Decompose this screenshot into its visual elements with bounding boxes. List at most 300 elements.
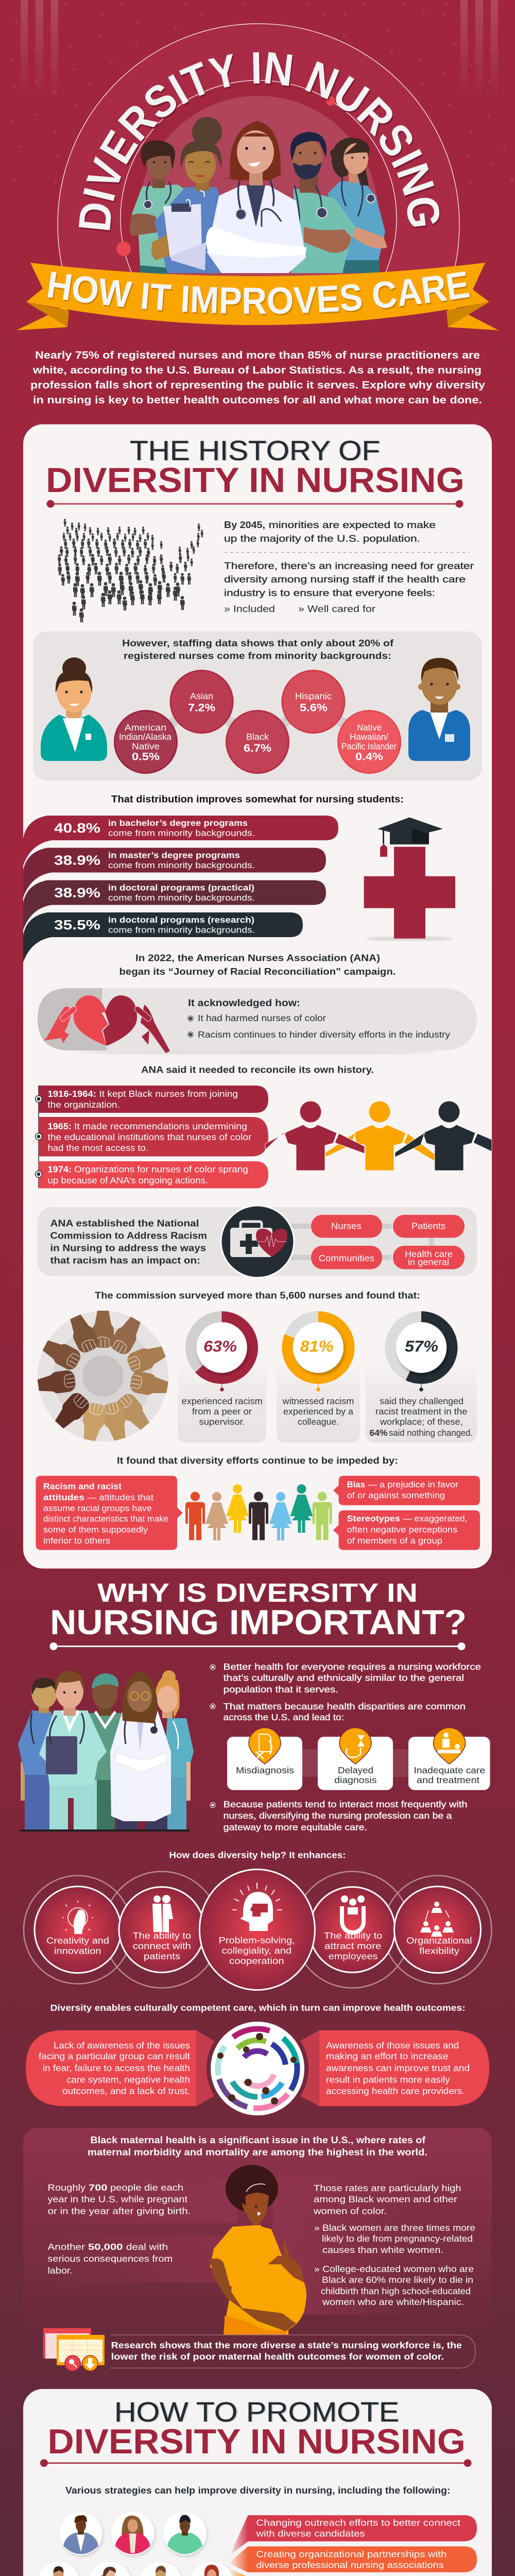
bar: masters [23,848,326,897]
bullet: disparities: That matters because health disparities are common [224,1701,466,1711]
callout: stereotypes: — exaggerated, [403,1514,468,1523]
nurse a [18,1677,57,1829]
bullet: better health: population that it serves. [224,1684,338,1694]
nurse 2 with clipboard [151,117,224,273]
stat card: 63%: experienced racism [182,1396,263,1406]
bubble: Asian [170,671,233,733]
header decoration: sparkles and light stripes [11,0,513,183]
bubble: American Indian/Alaska Native [114,711,177,773]
callout: stereotypes: often negative perceptions [347,1525,457,1535]
main title: DIVERSITY IN NURSING [78,52,440,232]
bar: doctoral research: 35.5% [54,917,100,933]
card: misdiagnosis: Misdiagnosis [236,1765,294,1775]
text: 700 people: Roughly [47,2182,85,2193]
bubble: Hispanic: 5.6% [300,702,328,714]
pill: Communities: Communities [319,1253,374,1263]
subheading: impeded by: It found that diversity efforts continue to be impeded by: [117,1455,398,1466]
icon: medical bag with heart [221,1206,294,1278]
timeline item: 1965: had the most access to. [47,1143,148,1153]
text: national commission: in Nursing to address the ways [50,1243,206,1253]
text: it acknowledged how [188,998,450,1040]
strategy tails [229,2515,248,2576]
stat card: 63%: from a peer or [192,1406,252,1417]
bar: bachelors: come from minority backgrounds. [108,828,255,838]
donut chart: 57%: 57% [405,1337,438,1355]
bubble: Native Hawaiian/Pacific Islander: 0.4% [355,751,383,763]
bar: masters: in master’s degree programs [108,850,240,860]
text: those rates: Those rates are particularly high [314,2183,461,2193]
illustration: concentric circles of people [202,2013,313,2124]
icon: three people holding arms [265,1101,492,1171]
callout: bias: Bias [347,1480,365,1489]
callout: lack of awareness: outcomes, and a lack of trust. [62,2086,190,2096]
bar: doctoral practical: 38.9% [54,885,100,901]
section heading: why is diversity important: NURSING IMPORTANT? [50,1603,467,1642]
benefit: connect employees: The ability to [324,1930,382,1941]
avatar 1 [59,2512,104,2556]
benefit: creativity and innovation: innovation [54,1946,101,1956]
callout: racism and racist attitudes [36,1476,183,1550]
callout: research shows: Research shows that the more diverse a state’s nursing workforce is, the [111,2340,462,2350]
bubble: Native Hawaiian/Pacific Islander: Hawaiian/ [350,732,388,742]
callout: awareness: awareness can improve trust and [326,2063,470,2073]
benefit: connect employees: employees [329,1951,378,1961]
text: 50,000 [47,2242,173,2276]
bar: masters: 38.9% [54,852,100,868]
callout: lack of awareness [26,2030,214,2106]
heading: staffing data [122,638,394,661]
icon: circle of raised fists [37,1311,169,1443]
bubble: American Indian/Alaska Native: 0.5% [132,751,160,763]
icon: people in a cycle [420,1902,454,1937]
benefit: problem solving: cooperation [229,1956,284,1966]
bubble: Native Hawaiian/Pacific Islander: Native [357,722,382,733]
bubble connectors [146,702,369,742]
text band left bottom [31,2235,221,2282]
connector lines [288,1226,432,1258]
callout: stereotypes: of members of a group [347,1536,442,1546]
callout: awareness: accessing health care providers. [326,2086,465,2096]
avatar 7 [190,2562,234,2576]
panel: staffing data [33,632,482,781]
timeline item: 1974: up because of ANA’s ongoing actions. [47,1175,208,1185]
text: it acknowledged how: Racism continues to hinder diversity efforts in the industry [198,1029,450,1040]
avatars: diverse staff [37,2512,234,2576]
bubble: American Indian/Alaska Native: Native [132,741,160,751]
icon: nurse in blue [408,658,470,761]
section heading: history [46,435,465,500]
bubble: Asian: 7.2% [188,702,215,714]
callout: research shows [43,2328,475,2371]
callout: racism and racist attitudes: some of them supposedly [43,1525,148,1535]
timeline item: 1916-1964: It kept Black nurses from joining [99,1089,238,1099]
bubble: American Indian/Alaska Native: Indian/Alaska [119,732,171,742]
donut chart: 57% [390,1317,452,1392]
benefit: organizational flexibility: flexibility [419,1946,459,1956]
text: it acknowledged how: It had harmed nurses of color [198,1013,326,1023]
benefit: connect with patients [119,1887,204,1972]
callout: lack of awareness: in fear, failure to access the health [43,2063,190,2073]
illustration: five nurses standing [18,1670,194,1832]
pill: Communities [311,1246,382,1269]
text: by 2045: By 2045, [224,520,265,530]
bullet: because patients: gateway to more equitable care. [224,1822,367,1832]
illustration: pregnant woman [210,2165,306,2335]
timeline item: 1974 [35,1161,268,1188]
callout: awareness: result in patients more easily [326,2075,450,2085]
text: 50,000: serious consequences from [47,2253,173,2264]
benefit: connect employees: attract more [324,1941,381,1951]
strategy: partnerships [248,2546,477,2572]
callout: lack of awareness: care system, negative health [66,2075,190,2085]
diagram: five benefit circles [24,1869,491,1990]
callout: awareness [301,2030,489,2106]
text: 50,000: labor. [47,2265,73,2276]
right ribbon fold [447,302,489,327]
ground line [20,1829,190,1832]
text band right [273,2176,412,2314]
benefit: problem solving: collegiality, and [221,1945,291,1956]
header rings [57,23,460,276]
red dot on ring, left [116,242,131,256]
person: dark [395,1101,492,1171]
bullet: disparities [210,1701,466,1722]
text: 50,000: deal with [126,2242,168,2252]
bubble: Hispanic [282,671,345,733]
subheading: ANA reconcile: ANA said it needed to reconcile its own history. [141,1065,374,1075]
text: 700 people: year in the U.S. while pregnant [47,2194,187,2205]
strategy: partnerships: diverse professional nursing associations [256,2560,444,2570]
text: those rates [313,2183,475,2307]
bubble: Native Hawaiian/Pacific Islander [338,711,401,773]
text: those rates: causes than white women. [322,2245,443,2255]
benefit: connect with patients: connect with [133,1941,191,1951]
stat card: 63% [178,1317,266,1443]
subheading: culturally competent care: Diversity enables culturally competent care, which in turn can improve health outcomes: [50,2003,466,2013]
stat card: 81%: witnessed racism [282,1396,354,1406]
timeline item: 1965: the educational institutions that nurses of color [47,1132,252,1142]
text: by 2045: up the majority of the U.S. population. [224,534,420,544]
subheading: survey: The commission surveyed more than 5,600 nurses and found that: [95,1290,420,1301]
stat card: 57% [366,1317,477,1443]
bullet: better health [210,1662,481,1694]
panel: national commission [38,1206,477,1278]
strategy: outreach [248,2515,477,2541]
text: those rates: likely to die from pregnancy-related [322,2233,473,2244]
text: therefore [224,561,474,614]
icon: charts and magnifier [43,2328,105,2371]
text: therefore: » Included [224,604,275,614]
text: those rates: among Black women and other [314,2194,457,2205]
section heading: why is diversity important [50,1578,467,1642]
callout: lack of awareness: Lack of awareness of the issues [54,2040,190,2050]
bar: doctoral research: come from minority backgrounds. [108,925,255,935]
text: therefore: Therefore, there’s an increasing need for greater [224,561,474,571]
strategy: partnerships: Creating organizational partnerships with [256,2549,447,2560]
bullet: because patients: nurses, diversifying the nursing profession can be a [224,1810,452,1821]
ribbon body [26,263,489,325]
callout: stereotypes [333,1511,480,1550]
icon: magnet attracting people [341,1895,365,1933]
bubble: Black: 6.7% [244,742,271,754]
avatar 3 [163,2512,208,2556]
text: 50,000: 50,000 [88,2242,123,2252]
text: those rates: » College-educated women who are [314,2264,474,2274]
subheading: how does diversity help: How does diversity help? It enhances: [169,1850,346,1860]
intro paragraph: in nursing is key to better health outcomes for all and what more can be done. [33,394,482,406]
callout: bias: of or against something [347,1490,445,1500]
text: those rates: women who are white/Hispanic. [322,2297,464,2307]
text: 700 people: 700 [89,2182,108,2193]
text: national commission: Commission to Address Racism [50,1231,207,1241]
bar: doctoral research [23,912,303,962]
section heading: how to promote: DIVERSITY IN NURSING [47,2422,466,2461]
bubble: Native Hawaiian/Pacific Islander: Pacific Islander [341,741,397,751]
bar: bachelors [23,816,338,866]
heading: staffing data: However, staffing data shows that only about 20% of [122,638,394,648]
left ribbon tail [16,304,67,330]
callout: research shows: lower the risk of poor maternal health outcomes for women of color. [111,2351,444,2362]
intro paragraph: Nearly 75% of registered nurses and more than 85% of nurse practitioners are [35,349,480,361]
orange ribbon banner [16,263,499,330]
stat card: 57%: said they challenged [380,1396,464,1406]
callout: racism and racist attitudes: distinct characteristics that make [43,1514,168,1524]
card: delayed diagnosis: Delayed [338,1765,373,1775]
section heading: history: DIVERSITY IN NURSING [46,461,465,500]
section heading: history: THE HISTORY OF [130,435,380,466]
illustration: five medical staff [130,117,387,276]
heading divider [40,2459,472,2467]
pill: Health care in general: Health care [405,1249,453,1259]
timeline item: 1974: 1974: [47,1164,72,1175]
text: it acknowledged how: It acknowledged how: [188,998,300,1009]
benefit: connect with patients: patients [144,1951,180,1961]
dashed divider [225,552,469,553]
heading: black maternal health: Black maternal health is a significant issue in the U.S., where rates of [90,2135,426,2145]
icon: seven diverse figures [185,1484,332,1540]
intro paragraph: profession falls short of representing the public it serves. Explore why diversity [30,379,486,391]
red dot on ring [326,96,335,106]
text: ANA campaign: In 2022, the American Nurses Association (ANA) [135,953,380,963]
stat card: 81%: colleague. [298,1417,339,1427]
donut chart: 63% [191,1317,252,1392]
text: those rates: Black are 60% more likely to die in [322,2275,473,2285]
stat card: 57%: workplace; of these, [380,1417,463,1427]
callout: racism and racist attitudes: inferior to others [43,1536,110,1546]
nurse d in white coat [110,1671,171,1829]
callout: racism and racist attitudes: attitudes [43,1493,84,1502]
stat card: 57%: racist treatment in the [375,1406,468,1417]
stat card: 81% [277,1317,360,1443]
benefit: organizational flexibility [394,1887,481,1973]
nurse 1 [130,140,191,276]
avatar 2 [111,2512,156,2556]
outer rings [24,1871,491,1988]
timeline item: 1974: Organizations for nurses of color sprang [74,1164,248,1175]
callout: bias [333,1476,480,1505]
nurse e [154,1670,194,1829]
map of US made of people [58,519,203,622]
person: red [265,1101,365,1171]
bubble: Black [227,711,288,773]
callout: lack of awareness: facing a particular group can result [39,2051,190,2061]
donut chart: 81%: 81% [300,1337,334,1355]
ribbon subtitle: HOW IT IMPROVES CARE [47,271,471,315]
text: ANA campaign: began its “Journey of Racial Reconciliation" campaign. [119,967,396,977]
panel: the history of diversity in nursing [23,425,492,1568]
benefit: connect with patients: The ability to [133,1930,191,1941]
subheading: nursing students: That distribution improves somewhat for nursing students: [111,794,404,805]
timeline item: 1965 [35,1117,268,1156]
text: 700 people: or in the year after giving birth. [47,2206,191,2216]
intro paragraph [30,349,486,406]
panel: it acknowledged how [38,988,477,1054]
donut chart: 81% [287,1317,349,1392]
text: by 2045 [224,520,436,544]
icon: head with puzzle piece [232,1883,282,1931]
bubble: Black: Black [246,732,269,742]
text: those rates: childbirth than high school-educated [321,2286,471,2296]
callout: racism and racist attitudes: assume racial groups have [43,1503,152,1513]
strategy: outreach: with diverse candidates [255,2529,365,2539]
text: those rates: women of color. [313,2206,387,2216]
nurse b [39,1671,107,1829]
donut chart: 63%: 63% [203,1337,237,1355]
timeline item: 1916-1964: the organization. [47,1099,120,1110]
pill: Health care in general: in general [408,1257,449,1267]
timeline of ANA history [35,1086,268,1188]
callout: awareness: Awareness of those issues and [326,2040,459,2050]
card: delayed diagnosis: diagnosis [334,1775,377,1785]
section heading: how to promote: HOW TO PROMOTE [114,2397,399,2428]
avatar 5 [88,2562,132,2576]
benefit: problem solving [199,1869,315,1990]
text band left top [31,2178,237,2223]
bullet: because patients [210,1799,468,1832]
icon: broken heart with figures [43,995,170,1053]
bubble: American Indian/Alaska Native: American [125,722,166,733]
section heading: how to promote [47,2397,466,2461]
pill: Nurses [311,1215,382,1238]
callout: racism and racist attitudes: Racism and racist [43,1482,122,1492]
benefit: organizational flexibility: Organizational [406,1936,472,1946]
pill: Health care in general [393,1246,465,1269]
doctor in white coat [206,121,306,273]
section heading: why is diversity important: WHY IS DIVERSITY IN [97,1578,418,1607]
timeline item: 1965: 1965: [47,1121,72,1131]
strategy: outreach: Changing outreach efforts to better connect [256,2517,460,2528]
timeline item: 1916-1964 [35,1086,268,1113]
timeline item: 1916-1964: 1916-1964: [47,1089,96,1099]
text: 50,000: Another [47,2242,85,2252]
stat card: 57%: 64% [370,1428,388,1438]
stat card: 81%: experienced by a [283,1406,353,1417]
subheading: strategies: Various strategies can help improve diversity in nursing, including the following: [65,2485,450,2496]
pill: Patients: Patients [411,1221,445,1231]
bullet: because patients: Because patients tend to interact most frequently with [224,1799,468,1809]
heading: staffing data: registered nurses come from minority backgrounds: [124,651,391,661]
chart: nursing student percentages [23,816,338,962]
benefit: creativity and innovation: Creativity and [46,1936,109,1946]
avatar 6 [139,2562,183,2576]
avatar 4 [37,2562,81,2576]
bar: bachelors: in bachelor’s degree programs [108,818,248,828]
card: delayed diagnosis [318,1727,393,1790]
text: national commission [50,1218,207,1266]
bar: doctoral practical [23,880,326,930]
callout: awareness: making an effort to increase [326,2051,448,2061]
callout: racism and racist attitudes: — attitudes that [87,1493,153,1502]
benefit: creativity and innovation [35,1887,121,1973]
stat card: 63%: supervisor. [199,1417,245,1427]
icon: graduation cap on cross [364,817,455,940]
text: those rates: » Black women are three times more [314,2223,475,2233]
bullet: better health: that’s culturally and ethnically similar to the general [224,1673,464,1683]
right ribbon tail [448,304,499,330]
text: therefore: industry is to ensure that everyone feels: [224,588,435,598]
callout: stereotypes: Stereotypes [347,1514,400,1523]
card: misdiagnosis [227,1727,302,1790]
bubble: Hispanic: Hispanic [295,691,332,701]
bullet list: why diversity matters [210,1662,481,1722]
benefit: problem solving: Problem-solving, [219,1935,295,1945]
text: national commission: ANA established the National [50,1218,199,1229]
heading: black maternal health: maternal morbidity and mortality are among the highest in the world. [88,2147,427,2158]
bubble: Asian: Asian [190,691,213,701]
icon: patient care pin [434,1727,466,1764]
icon: chart and stethoscope pin [249,1727,281,1764]
heading divider [46,500,464,508]
nurse c [85,1673,126,1829]
panel: black maternal health [23,2128,492,2335]
bullet: disparities: across the U.S. and lead to: [224,1712,344,1722]
nurse 5 [328,138,387,273]
nurse 4 [290,132,355,273]
bar: doctoral practical: in doctoral programs (practical) [108,883,254,892]
pill: Patients [393,1215,465,1238]
heading: black maternal health [88,2135,427,2158]
text: therefore: » Well cared for [298,604,375,614]
panel: how to promote diversity [23,2389,492,2576]
person: orange [325,1101,435,1171]
text: ANA campaign [119,953,396,977]
card: inadequate care [408,1727,490,1790]
icon: nurse and patient [152,1895,173,1932]
left ribbon fold [26,302,69,327]
bar: bachelors: 40.8% [54,820,100,836]
text: national commission: that racism has an impact on: [50,1256,200,1266]
card: inadequate care: Inadequate care [414,1765,485,1775]
icon: light bulb with hand [62,1901,93,1934]
text: 700 people [47,2182,191,2216]
bullet: better health: Better health for everyone requires a nursing workforce [224,1662,481,1672]
bar: masters: come from minority backgrounds. [108,860,255,870]
icon: stethoscope and hourglass pin [339,1727,371,1764]
bar: doctoral research: in doctoral programs (research) [108,915,254,925]
intro paragraph: white, according to the U.S. Bureau of Labor Statistics. As a result, the nursing [32,364,482,376]
heading divider [49,1642,466,1650]
benefit: connect employees [310,1887,395,1972]
text: 700 people: people die each [110,2182,183,2193]
icon: nurse in teal [41,657,107,761]
bar: doctoral practical: come from minority backgrounds. [108,893,255,903]
text: therefore: diversity among nursing staff if the health care [224,574,466,585]
pill: Nurses: Nurses [331,1221,362,1231]
strip behind outcome cards [258,1749,453,1777]
stat card: 57%: said nothing changed. [389,1428,473,1438]
card: inadequate care: and treatment [417,1775,479,1785]
text: by 2045: minorities are expected to make [269,520,436,530]
